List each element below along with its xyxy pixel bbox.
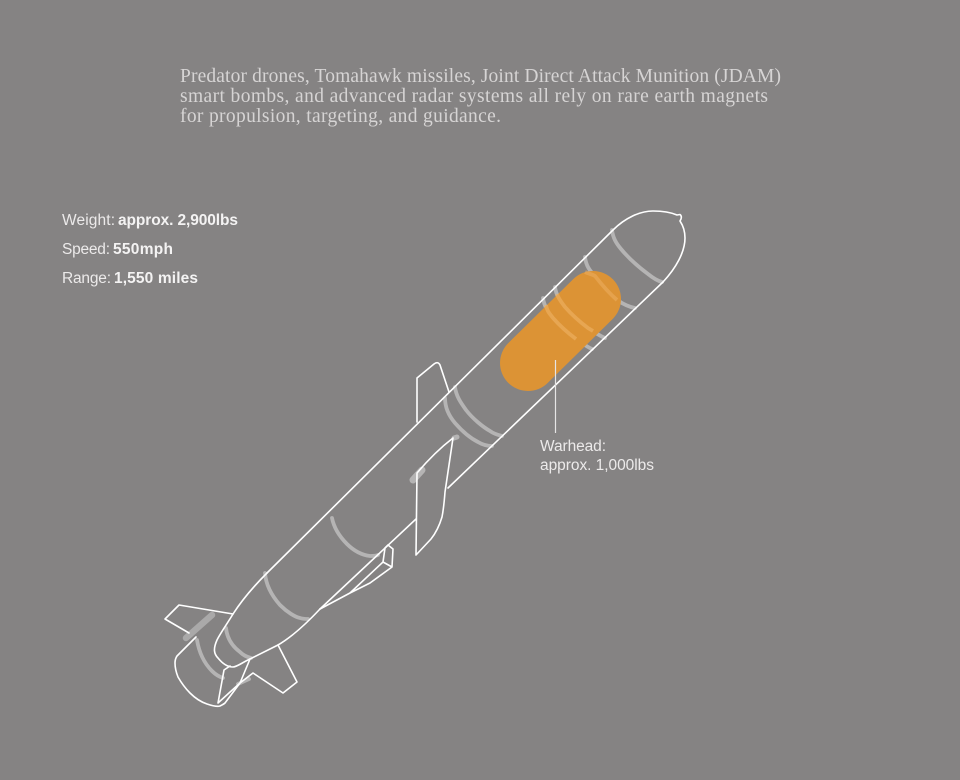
missile specifications: Weight: bbox=[62, 212, 115, 229]
warhead rings over highlight bbox=[546, 272, 617, 339]
nose and upper fuselage bbox=[267, 211, 685, 573]
upper fin bbox=[417, 363, 449, 422]
mid wing bbox=[416, 438, 453, 555]
missile specifications: Range: bbox=[62, 270, 111, 287]
missile specifications: 550mph bbox=[113, 241, 173, 258]
side strake bbox=[320, 545, 393, 609]
intro text: smart bombs, and advanced radar systems all rely on rare earth magnets bbox=[180, 86, 768, 107]
warhead label bbox=[540, 438, 654, 474]
tail body bbox=[214, 573, 320, 667]
warhead highlight bbox=[528, 299, 593, 363]
intro text: for propulsion, targeting, and guidance. bbox=[180, 106, 501, 127]
warhead label: approx. 1,000lbs bbox=[540, 457, 654, 474]
missile outline bbox=[165, 211, 685, 706]
missile specifications: approx. 2,900lbs bbox=[118, 212, 238, 229]
warhead label: Warhead: bbox=[540, 438, 606, 455]
intro text: Predator drones, Tomahawk missiles, Joint Direct Attack Munition (JDAM) bbox=[180, 66, 781, 87]
missile specifications: Speed: bbox=[62, 241, 110, 258]
tail fins bbox=[165, 605, 233, 633]
missile specifications: 1,550 miles bbox=[114, 270, 198, 287]
missile illustration bbox=[165, 211, 685, 706]
missile rings and thick fins bbox=[186, 230, 662, 684]
warhead leader line bbox=[554, 360, 556, 433]
intro text bbox=[180, 66, 781, 127]
missile specifications bbox=[62, 212, 238, 287]
